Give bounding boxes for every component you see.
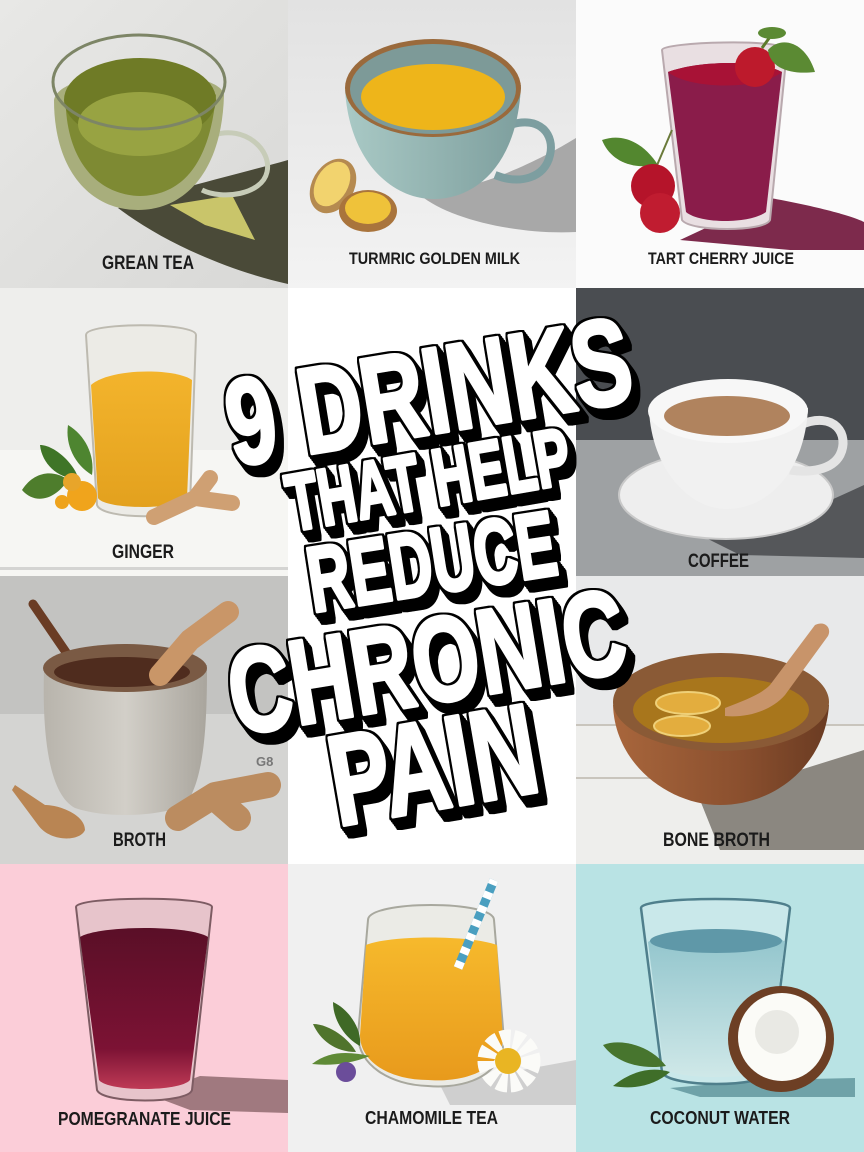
label: COFFEE: [688, 551, 749, 572]
icon: glass cup: [53, 35, 268, 210]
icon: saucer: [619, 451, 833, 539]
panel: chamomile tea: [288, 864, 576, 1152]
icon: mug: [43, 644, 207, 815]
icon: ginger in mug: [160, 612, 228, 675]
label: BROTH: [113, 830, 166, 851]
title: REDUCE: [300, 493, 563, 632]
text: GS mark: G8: [256, 754, 273, 769]
panel: pomegranate juice: [0, 864, 288, 1152]
icon: glass of juice: [76, 899, 212, 1100]
icon: cup: [345, 39, 551, 199]
title: 9 DRINKS: [216, 292, 641, 492]
panel: center title background: [288, 288, 576, 576]
icon: glass of tea: [358, 905, 504, 1086]
icon: leaves and fruit: [22, 425, 97, 511]
icon: wooden spoon: [12, 785, 85, 838]
title: THAT HELP: [280, 411, 577, 548]
icon: cinnamon stick: [33, 604, 85, 680]
title: [216, 292, 641, 854]
panel: turmeric golden milk: [288, 0, 576, 288]
icon: glass of juice: [662, 42, 787, 229]
icon: glass of water: [641, 899, 790, 1084]
icon: wooden bowl: [613, 653, 829, 805]
panel: coffee: [576, 288, 864, 576]
label: TURMRIC GOLDEN MILK: [349, 249, 521, 268]
icon: glass of ginger juice: [86, 325, 196, 516]
icon: striped straw: [458, 880, 494, 968]
panel: green tea: [0, 0, 288, 288]
icon: cup of coffee: [648, 379, 843, 509]
shadow: [150, 1076, 288, 1113]
icon: spoon: [725, 623, 829, 716]
shadow: [420, 138, 576, 232]
icon: cherry garnish: [735, 27, 815, 87]
shadow: [440, 1060, 576, 1105]
panel: tart cherry juice: [576, 0, 864, 288]
icon: ginger root: [178, 785, 268, 818]
label: GREAN TEA: [102, 253, 194, 274]
title: PAIN: [318, 677, 548, 854]
icon: ginger slices: [300, 150, 397, 232]
icon: daisy: [487, 1039, 531, 1083]
icon: ginger root: [154, 478, 232, 517]
icon: leaves: [603, 1042, 670, 1087]
shadow: [680, 198, 864, 250]
shadow: [670, 1078, 855, 1097]
label: COCONUT WATER: [650, 1108, 790, 1128]
panel: broth: [0, 576, 288, 864]
label: CHAMOMILE TEA: [365, 1108, 498, 1128]
label: BONE BROTH: [663, 830, 770, 851]
label: TART CHERRY JUICE: [648, 249, 794, 268]
title: CHRONIC: [219, 564, 635, 761]
label: GINGER: [112, 542, 174, 563]
panel: bone broth: [576, 576, 864, 864]
label: POMEGRANATE JUICE: [58, 1109, 231, 1129]
shadow: [118, 160, 288, 284]
panel: coconut water: [576, 864, 864, 1152]
shadow: [700, 750, 864, 850]
shadow: [680, 485, 864, 558]
icon: coconut: [728, 986, 834, 1092]
icon: leaves and lavender: [312, 1002, 370, 1082]
panel: ginger: [0, 288, 288, 576]
icon: cherries and leaf: [602, 130, 680, 233]
